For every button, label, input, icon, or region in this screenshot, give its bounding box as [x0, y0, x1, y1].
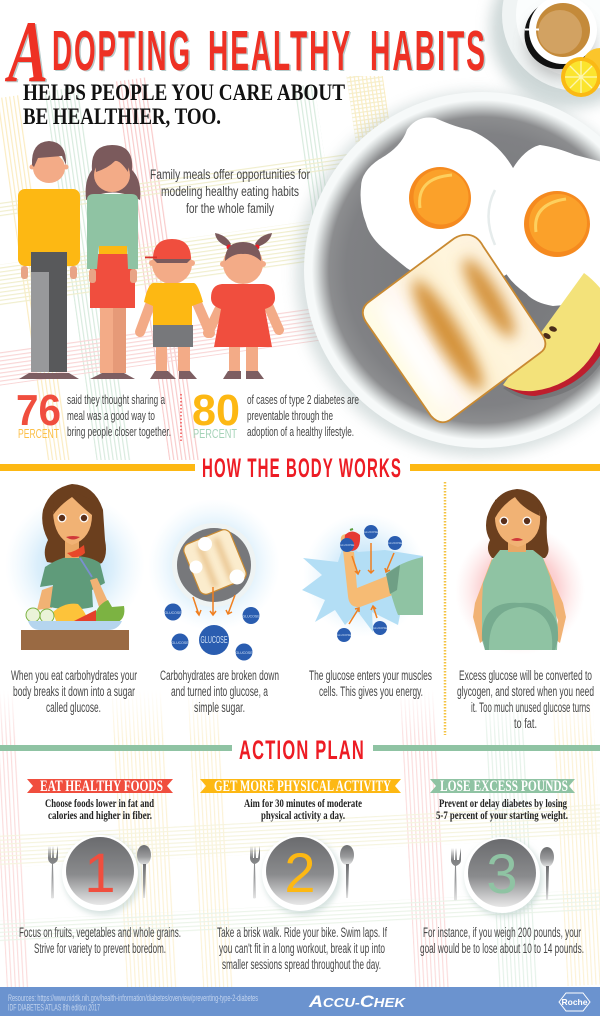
illustration: glucose entering arm muscle: GLUCOSE: [388, 541, 402, 545]
captions: how the body works: simple sugar.: [194, 700, 245, 715]
action 2: get more physical activity: Aim for 30 minutes of moderate: [244, 798, 362, 810]
heading: action plan: ACTION PLAN: [239, 735, 365, 765]
intro text: for the whole family: [186, 201, 274, 216]
action 2: get more physical activity: smaller sessions spread throughout the day.: [222, 957, 381, 972]
boy: [140, 239, 210, 379]
toast: [363, 235, 545, 422]
Roche logo: [559, 993, 590, 1011]
action 1: eat healthy foods: Strive for variety to prevent boredom.: [34, 941, 166, 956]
apple slice: [503, 273, 600, 400]
captions: how the body works: cells. This gives you energy.: [319, 684, 423, 699]
captions: how the body works: When you eat carbohydrates your: [11, 668, 137, 683]
father: [18, 141, 80, 379]
stat: 76 percent: 76: [16, 386, 61, 435]
white fade over lower background: [0, 690, 600, 740]
title: [5, 4, 489, 102]
stat: 80 percent: 80: [192, 386, 240, 435]
resources text: Resources: https://www.niddk.nih.gov/health-information/diabetes/overview/preventing-type-2-diabetes: [8, 993, 258, 1003]
action 2: get more physical activity: GET MORE PHYSICAL ACTIVITY: [214, 778, 391, 795]
subtitle: BE HEALTHIER, TOO.: [23, 104, 221, 129]
Accu-Chek logo: ACCU- CHEK: [308, 992, 407, 1011]
title: HEALTHY: [208, 19, 352, 83]
fried egg right: [490, 146, 600, 305]
plate with number 2: [250, 835, 354, 915]
action 2: get more physical activity: [200, 778, 401, 972]
heading: how the body works: [0, 453, 600, 483]
illustration: toast breaking down into glucose: GLUCOSE: [235, 651, 253, 655]
intro text: [150, 167, 310, 216]
action 1: eat healthy foods: Choose foods lower in fat and: [45, 798, 154, 810]
plate with number 3: [451, 837, 554, 917]
illustration: glucose entering arm muscle: [302, 513, 427, 642]
mother: [86, 145, 140, 379]
plate with number 3: 3: [486, 842, 518, 905]
intro text: modeling healthy eating habits: [161, 184, 299, 199]
resources text: IDF DIABETES ATLAS 8th edition 2017: [8, 1002, 100, 1012]
title: DOPTING: [52, 19, 192, 83]
stat: 80 percent: of cases of type 2 diabetes are: [247, 392, 359, 407]
stat: 80 percent: [192, 386, 359, 441]
plate with number 2: 2: [284, 841, 316, 904]
big breakfast plate: [296, 92, 600, 456]
stat: 80 percent: PERCENT: [193, 426, 237, 441]
subtitle: HELPS PEOPLE YOU CARE ABOUT: [23, 80, 345, 105]
plaid tablecloth lower background: [0, 700, 600, 987]
illustration: glucose entering arm muscle: GLUCOSE: [337, 633, 351, 637]
illustration: glucose entering arm muscle: GLUCOSE: [364, 530, 378, 534]
action 1: eat healthy foods: Focus on fruits, vegetables and whole grains.: [19, 925, 181, 940]
stat: 76 percent: meal was a good way to: [67, 408, 155, 423]
stat: 80 percent: preventable through the: [247, 408, 333, 423]
plate with number 1: 1: [84, 841, 116, 904]
illustration: glucose entering arm muscle: GLUCOSE: [373, 626, 387, 630]
Roche logo: Roche: [562, 997, 588, 1007]
coffee cup and lemon on saucer: [490, 0, 600, 108]
captions: how the body works: and turned into glucose, a: [171, 684, 268, 699]
action 2: get more physical activity: you can't fit in a long workout, break it up into: [219, 941, 385, 956]
action 1: eat healthy foods: calories and higher in fiber.: [48, 810, 152, 822]
illustration: toast breaking down into glucose: GLUCOSE: [164, 611, 182, 615]
title: HABITS: [370, 19, 487, 83]
action 1: eat healthy foods: [19, 778, 181, 956]
action 2: get more physical activity: Take a brisk walk. Ride your bike. Swim laps. If: [217, 925, 387, 940]
plate with number 1: [48, 835, 151, 915]
resources text: [8, 993, 258, 1012]
illustration: overweight woman: [455, 489, 585, 655]
action 1: eat healthy foods: EAT HEALTHY FOODS: [40, 778, 163, 795]
captions: how the body works: to fat.: [514, 716, 537, 731]
action 2: get more physical activity: physical activity a day.: [261, 810, 345, 822]
captions: how the body works: called glucose.: [46, 700, 101, 715]
intro text: Family meals offer opportunities for: [150, 167, 310, 182]
illustration: toast breaking down into glucose: GLUCOSE: [242, 614, 260, 618]
title: A: [5, 4, 48, 101]
illustration: glucose entering arm muscle: GLUCOSE: [340, 543, 354, 547]
stat: 80 percent: adoption of a healthy lifestyle.: [247, 424, 354, 439]
footer bar: [0, 987, 600, 1016]
title: A: [6, 5, 50, 102]
dotted column divider: [444, 482, 446, 735]
captions: how the body works: Carbohydrates are broken down: [160, 668, 279, 683]
stat: 76 percent: PERCENT: [18, 426, 59, 441]
stat: 76 percent: bring people closer together.: [67, 424, 171, 439]
title: HEALTHY: [210, 20, 354, 84]
illustration: toast breaking down into glucose: GLUCOSE: [171, 641, 189, 645]
illustration: woman eating: [5, 484, 145, 650]
heading: how the body works: HOW THE BODY WORKS: [202, 453, 402, 483]
action 3: lose excess pounds: [420, 778, 584, 956]
girl: [208, 233, 279, 379]
captions: how the body works: body breaks it down into a sugar: [13, 684, 135, 699]
stat: 76 percent: said they thought sharing a: [67, 392, 165, 407]
title: DOPTING: [54, 20, 194, 84]
fried egg left: [362, 118, 513, 300]
illustration: toast breaking down into glucose: GLUCOSE: [200, 635, 228, 646]
plaid tablecloth upper background: [0, 76, 389, 460]
illustration: toast breaking down into glucose: [148, 499, 280, 660]
captions: how the body works: [11, 668, 594, 731]
stat: 76 percent: [16, 386, 171, 441]
heading: action plan: [0, 735, 600, 765]
subtitle: [23, 80, 345, 129]
captions: how the body works: The glucose enters your muscles: [309, 668, 432, 683]
family illustration: [18, 141, 279, 379]
